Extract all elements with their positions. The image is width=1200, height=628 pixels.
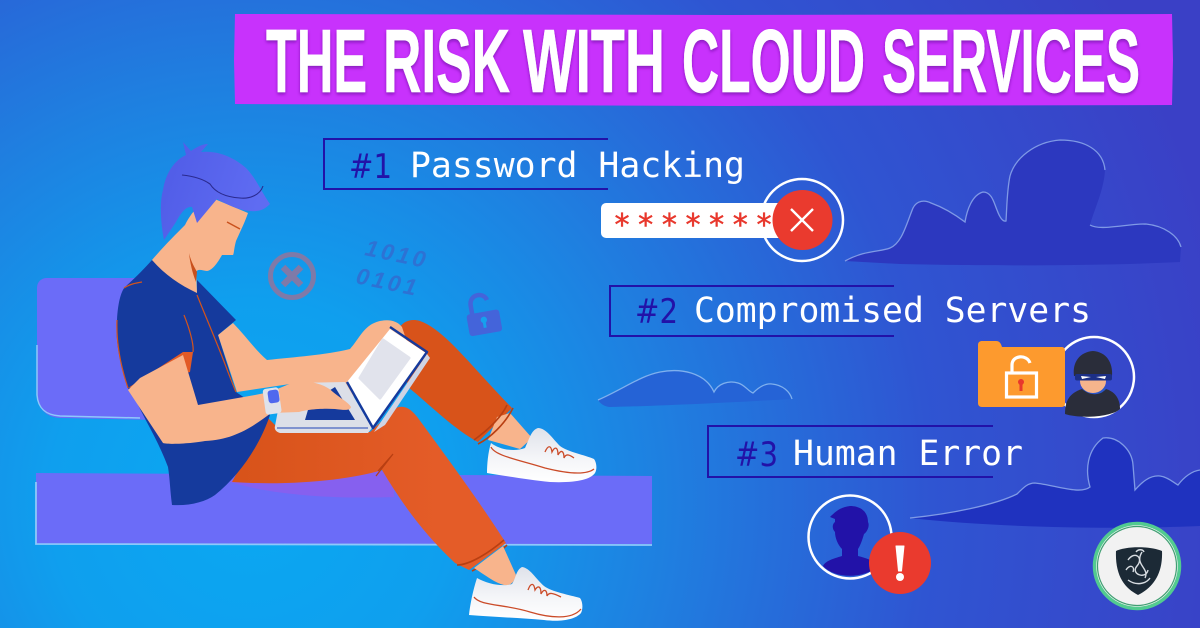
- icon: red alert badge: [869, 532, 931, 594]
- person illustration: [117, 142, 596, 621]
- title banner: [234, 12, 1173, 112]
- cloud: lower right: [910, 438, 1200, 528]
- cloud: middle: [598, 371, 792, 407]
- hair: [161, 142, 270, 240]
- title banner: CLOUD: [682, 12, 865, 112]
- neck and face: [152, 199, 248, 293]
- heading: compromised servers: #2: [635, 292, 678, 332]
- ankle: near: [474, 546, 516, 585]
- icon: hacker in circle: [1054, 337, 1134, 417]
- heading: password hacking: Password Hacking: [410, 146, 745, 186]
- binary digits: 1010: [363, 234, 428, 273]
- title banner: WITH: [523, 12, 665, 112]
- title banner: THE: [266, 12, 367, 112]
- binary digits: [354, 234, 428, 301]
- icon: orange folder with open lock: [978, 341, 1065, 407]
- shirt: [117, 260, 270, 505]
- logo badge: [1094, 524, 1180, 608]
- near arm and hand: [128, 355, 351, 444]
- near shoe: [469, 567, 582, 621]
- icon: rejected password field: *******: [613, 208, 773, 243]
- far leg: [398, 320, 532, 449]
- eye line: [227, 222, 240, 229]
- icon: open padlock: [463, 292, 503, 337]
- heading: password hacking: [324, 139, 745, 189]
- binary digits: 0101: [354, 262, 419, 301]
- laptop: [275, 327, 430, 433]
- watch: [262, 387, 282, 415]
- neck shadow: [189, 253, 197, 282]
- heading: password hacking: #1: [349, 147, 392, 187]
- title banner: RISK: [383, 12, 510, 112]
- heading: human error: Human Error: [793, 434, 1023, 474]
- heading: human error: #3: [735, 435, 778, 475]
- seat cushion: [36, 470, 652, 545]
- near leg: [232, 407, 507, 571]
- icon: rejected password field: [601, 179, 843, 261]
- icon: x circle: [270, 254, 314, 298]
- icon: user silhouette: [808, 496, 892, 578]
- heading: compromised servers: Compromised Servers: [694, 291, 1091, 331]
- heading: human error: [708, 426, 1023, 477]
- far shoe: [487, 428, 596, 482]
- back cushion: [37, 278, 160, 420]
- cloud: upper right: [845, 140, 1181, 265]
- heading: compromised servers: [610, 286, 1091, 336]
- far arm: [218, 320, 408, 400]
